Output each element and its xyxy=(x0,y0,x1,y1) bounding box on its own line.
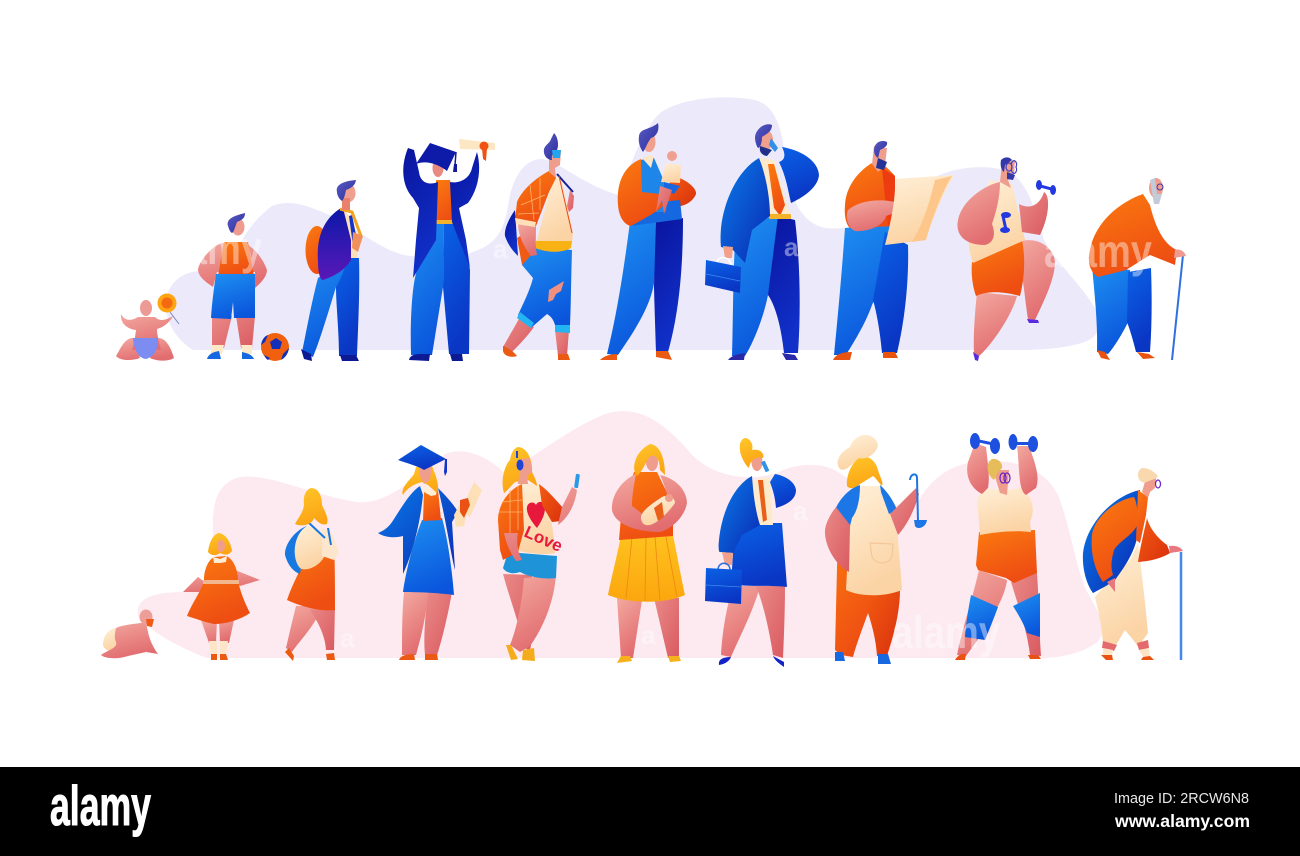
seal xyxy=(480,142,488,161)
watermark letter one: a xyxy=(340,623,355,653)
watermark bottom row xyxy=(340,496,1000,658)
watermark letter two: a xyxy=(793,496,808,526)
glasses xyxy=(1156,480,1160,488)
sunflower xyxy=(158,294,179,324)
head xyxy=(759,130,773,150)
apron pocket xyxy=(870,543,893,563)
left arm xyxy=(825,507,850,572)
baby xyxy=(656,151,681,214)
ripped knee xyxy=(548,281,564,302)
body xyxy=(101,622,158,658)
gown right side xyxy=(450,152,479,268)
shoes xyxy=(409,354,463,361)
shoes xyxy=(1097,350,1155,360)
right leg xyxy=(1011,573,1041,656)
head xyxy=(232,218,244,236)
shoes xyxy=(835,652,891,664)
skirt xyxy=(731,523,787,587)
diploma xyxy=(459,139,495,150)
hand xyxy=(1174,249,1186,258)
orange column xyxy=(1136,490,1148,543)
watermark word right: alamy xyxy=(1044,225,1152,277)
trouser left xyxy=(835,525,872,657)
hair xyxy=(337,180,356,201)
face xyxy=(860,457,872,475)
blue dress xyxy=(403,518,454,595)
collar xyxy=(213,556,227,563)
beard xyxy=(876,158,887,170)
left arm xyxy=(967,443,989,494)
cuff and hand xyxy=(723,246,733,258)
ladle xyxy=(910,474,927,528)
right sleeve xyxy=(880,485,897,514)
hair xyxy=(208,533,232,555)
arms xyxy=(198,243,267,288)
figure: boy with shorts xyxy=(198,213,267,359)
watermark letter one: a xyxy=(493,234,508,264)
figure: old man with cane xyxy=(1089,178,1186,360)
top xyxy=(619,472,673,540)
face xyxy=(217,540,225,552)
head xyxy=(642,132,656,152)
legs xyxy=(617,598,642,658)
shoes xyxy=(207,351,254,359)
hand xyxy=(1107,546,1183,592)
dumbbell right xyxy=(1036,180,1056,195)
shawl orange xyxy=(1092,497,1138,582)
tie xyxy=(758,480,767,522)
dumbbell left xyxy=(970,433,1000,454)
trousers left xyxy=(1092,265,1130,354)
shorts xyxy=(503,552,557,578)
shirt xyxy=(340,208,358,262)
head and neck xyxy=(872,146,887,172)
trousers front xyxy=(302,258,347,357)
shirt xyxy=(760,158,790,216)
left leg xyxy=(957,570,1007,656)
face xyxy=(419,466,432,484)
hair xyxy=(740,438,763,468)
right sock xyxy=(1013,593,1040,637)
belt xyxy=(434,220,460,224)
hair xyxy=(639,123,658,152)
shoes xyxy=(728,353,798,360)
raised arm xyxy=(779,147,819,203)
beard xyxy=(1150,178,1162,204)
figure: old man with dumbbells xyxy=(957,157,1056,361)
torso xyxy=(536,176,573,244)
left sock xyxy=(965,595,998,640)
trousers left xyxy=(834,225,890,355)
tank top xyxy=(218,242,254,276)
head and neck xyxy=(549,150,561,178)
briefcase xyxy=(705,258,741,293)
tie xyxy=(349,215,357,246)
skirt xyxy=(287,540,335,610)
figure: teen with backpack xyxy=(301,180,363,361)
shoes xyxy=(211,654,228,660)
shirt xyxy=(977,487,1033,535)
baby bundle xyxy=(641,496,675,525)
figure: man reading newspaper xyxy=(833,141,954,360)
trousers right xyxy=(654,218,683,352)
legs xyxy=(212,316,255,348)
shirt xyxy=(508,484,555,554)
red edge xyxy=(559,176,572,233)
chef hat xyxy=(838,435,878,470)
raised arm xyxy=(770,474,796,508)
arm xyxy=(504,487,577,561)
visor xyxy=(552,150,561,158)
figure: young woman with love shirt xyxy=(498,447,580,661)
hair bun xyxy=(1138,468,1158,483)
shirt check xyxy=(515,170,556,265)
arm xyxy=(518,224,537,256)
trousers right xyxy=(1127,268,1152,352)
hair xyxy=(634,444,665,476)
shoulder arm xyxy=(957,182,1000,245)
headset xyxy=(516,451,518,458)
figure: father holding baby xyxy=(600,123,696,360)
glasses xyxy=(1000,473,1010,483)
figure: mother holding baby xyxy=(608,444,687,663)
raised foot xyxy=(1027,319,1039,323)
cane xyxy=(1172,255,1183,360)
image id: Image ID: 2RCW6N8 xyxy=(1114,790,1249,807)
collar xyxy=(422,484,438,496)
left skin leg xyxy=(503,317,534,352)
legs xyxy=(721,586,760,657)
shawl blue xyxy=(1083,490,1140,593)
gown left side xyxy=(403,148,438,278)
shoes xyxy=(1101,655,1154,660)
phone xyxy=(761,461,769,472)
baby legs xyxy=(116,338,174,361)
belt xyxy=(203,580,239,584)
figure: crawling baby girl xyxy=(101,610,158,658)
dress xyxy=(187,556,250,624)
right strap xyxy=(557,174,573,192)
cuff xyxy=(722,552,733,565)
foot xyxy=(973,352,979,361)
sweater xyxy=(1089,194,1177,277)
shirt xyxy=(436,180,458,222)
shoes xyxy=(506,645,535,661)
jacket xyxy=(318,208,351,280)
backpack xyxy=(505,210,518,256)
watermark word left: alamy xyxy=(154,222,262,274)
baby torso and arms xyxy=(121,314,173,350)
socks xyxy=(1102,640,1149,651)
tassel xyxy=(455,152,456,165)
socks xyxy=(211,345,252,354)
jeans xyxy=(518,247,572,327)
standing leg xyxy=(974,292,1017,357)
trouser right xyxy=(866,590,900,656)
cap xyxy=(416,143,456,171)
baby diaper xyxy=(133,338,158,359)
logo: alamy xyxy=(50,774,151,837)
watermark letter two: a xyxy=(784,232,799,262)
hair xyxy=(503,447,537,493)
right skin leg xyxy=(555,330,569,356)
beard xyxy=(760,146,772,156)
legs xyxy=(286,606,322,652)
neck and face xyxy=(993,470,1009,495)
hair xyxy=(755,124,772,148)
shoes xyxy=(617,656,681,663)
hair xyxy=(295,488,328,525)
band xyxy=(654,502,664,521)
dumbbell right xyxy=(1008,434,1038,452)
head xyxy=(432,159,444,177)
head xyxy=(342,184,356,202)
hand xyxy=(352,232,363,252)
trousers right xyxy=(768,216,800,353)
newspaper xyxy=(885,175,954,245)
shoes xyxy=(301,349,359,361)
shoes xyxy=(833,352,898,360)
head xyxy=(140,610,152,624)
love text: Love xyxy=(521,522,565,556)
shorts xyxy=(976,530,1037,583)
baby head xyxy=(140,300,152,316)
hair bun xyxy=(988,459,1002,480)
watermarks top row xyxy=(154,222,1152,277)
right arm xyxy=(890,488,919,535)
tank top xyxy=(969,180,1025,263)
trousers left xyxy=(607,222,658,355)
face xyxy=(646,453,658,471)
hand and diploma xyxy=(461,482,482,517)
cane xyxy=(1180,552,1182,660)
red sleeve xyxy=(668,175,696,207)
phone xyxy=(574,474,580,488)
figure: female chef xyxy=(825,435,927,664)
icon: soccer ball xyxy=(261,333,289,361)
face xyxy=(312,498,322,514)
gown xyxy=(378,486,458,574)
arm xyxy=(847,200,900,231)
shoes xyxy=(503,346,570,360)
shirt blob xyxy=(295,526,326,569)
hair xyxy=(402,466,438,495)
apron xyxy=(846,486,902,595)
shirt xyxy=(752,477,773,525)
tassel xyxy=(444,459,447,476)
belt xyxy=(769,214,791,219)
phone xyxy=(769,138,778,152)
right arm xyxy=(1017,446,1038,495)
beard and hair xyxy=(1001,157,1015,180)
jeans cuffs xyxy=(517,312,570,333)
trousers xyxy=(411,220,444,355)
hair xyxy=(874,141,887,158)
collar strap xyxy=(340,209,361,236)
figure: girl in dress xyxy=(183,533,260,660)
figure: young man with visor xyxy=(503,133,574,360)
shoes xyxy=(600,351,672,360)
sweater xyxy=(845,162,895,228)
glasses xyxy=(1157,184,1163,190)
trousers left xyxy=(732,215,780,356)
legs xyxy=(503,574,532,650)
footer band xyxy=(0,767,1300,856)
top xyxy=(423,490,441,521)
lavender blob behind men xyxy=(166,97,1099,350)
face xyxy=(752,453,762,471)
forearm xyxy=(1019,192,1048,235)
hair xyxy=(544,133,558,160)
briefcase xyxy=(705,563,742,604)
arms xyxy=(183,570,260,592)
watermark word: alamy xyxy=(892,606,1000,658)
heart xyxy=(527,502,545,528)
pink blob behind women xyxy=(138,411,1103,658)
pleats xyxy=(626,537,677,601)
hair xyxy=(228,213,245,233)
bib xyxy=(146,619,154,627)
figure: old woman with cane xyxy=(1083,468,1183,660)
socks xyxy=(209,641,228,654)
skirt xyxy=(608,535,685,602)
head and neck xyxy=(1000,160,1015,188)
sleeve xyxy=(515,218,536,227)
arms xyxy=(612,474,687,532)
backpack xyxy=(306,226,328,274)
shorts xyxy=(211,274,255,319)
head and neck xyxy=(1142,478,1156,498)
vest xyxy=(640,158,668,212)
left sleeve xyxy=(835,485,860,526)
tie xyxy=(768,164,785,216)
head xyxy=(1149,178,1163,198)
checked shirt xyxy=(498,484,565,560)
figure: woman lifting dumbbells xyxy=(955,433,1041,660)
shoes xyxy=(285,648,335,661)
trousers back xyxy=(336,258,359,356)
sweater xyxy=(618,159,663,226)
straps xyxy=(308,522,331,545)
figure: baby boy with sunflower xyxy=(116,294,179,361)
raised thigh xyxy=(1018,240,1055,320)
waist band xyxy=(628,200,682,226)
jacket xyxy=(721,158,770,263)
figure: schoolgirl with backpack xyxy=(285,488,339,661)
dumbbell left xyxy=(1000,212,1011,233)
figure: male graduate xyxy=(403,139,495,361)
collar xyxy=(642,155,654,168)
figure: female graduate xyxy=(378,445,482,660)
figure: businesswoman on phone xyxy=(705,438,796,667)
diaper xyxy=(103,628,122,651)
figure: businessman on the phone xyxy=(705,124,819,360)
trousers xyxy=(1095,543,1148,650)
feet xyxy=(1103,648,1150,657)
jacket xyxy=(719,476,760,553)
shorts xyxy=(972,240,1024,296)
face xyxy=(518,458,532,484)
cap xyxy=(398,445,446,470)
legs xyxy=(201,620,234,643)
glasses xyxy=(1006,161,1016,173)
watermark letter three: a xyxy=(641,620,656,650)
trousers right xyxy=(873,232,908,353)
red sleeve xyxy=(1138,518,1170,562)
legs xyxy=(402,592,428,655)
website: www.alamy.com xyxy=(1114,811,1250,831)
backpack xyxy=(285,526,307,574)
hair xyxy=(847,457,883,488)
waist xyxy=(535,241,572,252)
shoes xyxy=(955,654,1041,660)
shoes xyxy=(719,656,784,667)
shoes xyxy=(399,654,438,660)
